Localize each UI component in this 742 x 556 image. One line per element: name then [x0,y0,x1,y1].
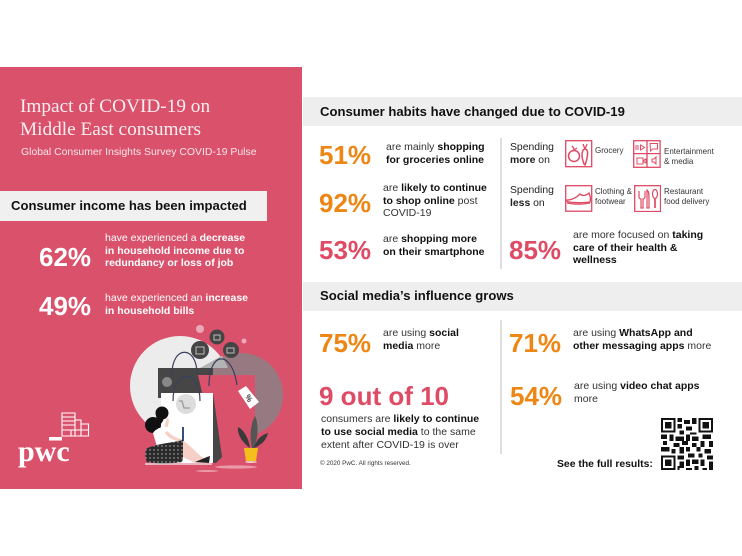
text: 49% description: in household bills [105,305,194,317]
text: 92% description: COVID-19 [383,207,431,219]
wordmark: pwc [18,435,70,468]
heading: consumer habits [303,97,742,126]
label: clothing: Clothing & [595,187,632,196]
text: 49% description [105,292,248,317]
divider bottom [500,320,502,454]
text: 75% description [383,327,459,352]
text: 75% description: are using social [383,327,459,339]
heading: consumer income: Consumer income has been impacted [11,198,247,213]
text: 49% description: have experienced an increase [105,292,248,304]
text: spending more on: Spending [510,142,554,153]
text: spending more on: more on [510,154,550,166]
heading: social media: Social media’s influence grows [320,288,514,303]
text: 71% description: are using WhatsApp and [573,327,693,339]
stat: 49%: 49% [39,291,91,321]
label: entertainment: Entertainment [664,147,714,156]
subtitle: Global Consumer Insights Survey COVID-19 Pulse [21,147,257,158]
text: 51% description: for groceries online [386,154,484,166]
text: 62% description: redundancy or loss of job [105,257,233,269]
logo: PwC [18,412,90,468]
illustration: shopping bags and woman [130,325,283,472]
stat: 62%: 62% [39,242,91,272]
text: 54% description [574,380,699,404]
label: restaurant: food delivery [664,196,709,206]
label: clothing [595,187,632,206]
title: Impact of COVID-19 on [20,96,210,117]
text: 53% description: on their smartphone [383,246,485,258]
text: 85% description [573,229,703,266]
text: 85% description: wellness [573,254,617,266]
heading: consumer income [0,191,267,221]
heading: consumer habits: Consumer habits have changed due to COVID-19 [320,104,625,119]
icon: restaurant [634,185,661,212]
text: spending less on [510,185,554,208]
text: copyright: © 2020 PwC. All rights reserved. [320,460,411,467]
text: 9 out of 10 description [321,413,479,451]
stat: 92%: 92% [319,188,371,218]
icon: clothing [565,185,592,212]
divider top [500,138,502,269]
icon: PwC logo blocks [49,412,90,440]
text: 54% description: more [574,392,598,404]
text: see the full results: See the full results: [557,459,653,470]
text: 92% description: to shop online post [383,194,478,206]
text: 9 out of 10 description: to use social media to the same [321,426,476,438]
label: entertainment: & media [664,156,693,166]
text: 92% description: are likely to continue [383,182,487,194]
label: entertainment [664,147,714,166]
panel: left pink background [0,67,302,489]
text: 85% description: care of their health & [573,242,677,254]
text: 53% description: are shopping more [383,233,477,245]
text: spending more on [510,142,554,166]
stat: 51%: 51% [319,140,371,170]
icon: entertainment [633,140,661,168]
stat: 75%: 75% [319,328,371,358]
title: Middle East consumers [20,119,201,140]
stat: 53%: 53% [319,235,371,265]
label: grocery: Grocery [595,146,623,155]
stat: 71%: 71% [509,328,561,358]
text: 51% description [386,141,485,166]
text: 71% description: other messaging apps more [573,340,711,352]
text: 9 out of 10 description: consumers are likely to continue [321,413,479,425]
stat: 54%: 54% [510,381,562,411]
text: 9 out of 10 description: extent after COVID-19 is over [321,439,459,451]
text: 53% description [383,233,485,258]
text: spending less on: less on [510,198,545,208]
text: 62% description: have experienced a decrease [105,232,245,244]
text: spending less on: Spending [510,185,554,196]
text: 85% description: are more focused on taking [573,229,703,241]
text: 51% description: are mainly shopping [386,141,485,153]
illustration: shopping bags and woman: % [243,393,254,404]
text: 62% description [105,232,245,269]
text: 92% description [383,182,487,219]
icon: grocery [565,140,592,168]
label: restaurant: Restaurant [664,187,703,196]
QR code [661,418,713,470]
text: 54% description: are using video chat apps [574,380,699,392]
text: 62% description: in household income due to [105,245,244,257]
stat: 85%: 85% [509,235,561,265]
label: clothing: footwear [595,196,626,206]
stat: 9 out of 10: 9 out of 10 [319,381,449,411]
title [20,96,210,140]
label: restaurant [664,187,710,206]
heading: social media [303,282,742,311]
text: 75% description: media more [383,340,440,352]
text: 71% description [573,327,711,352]
